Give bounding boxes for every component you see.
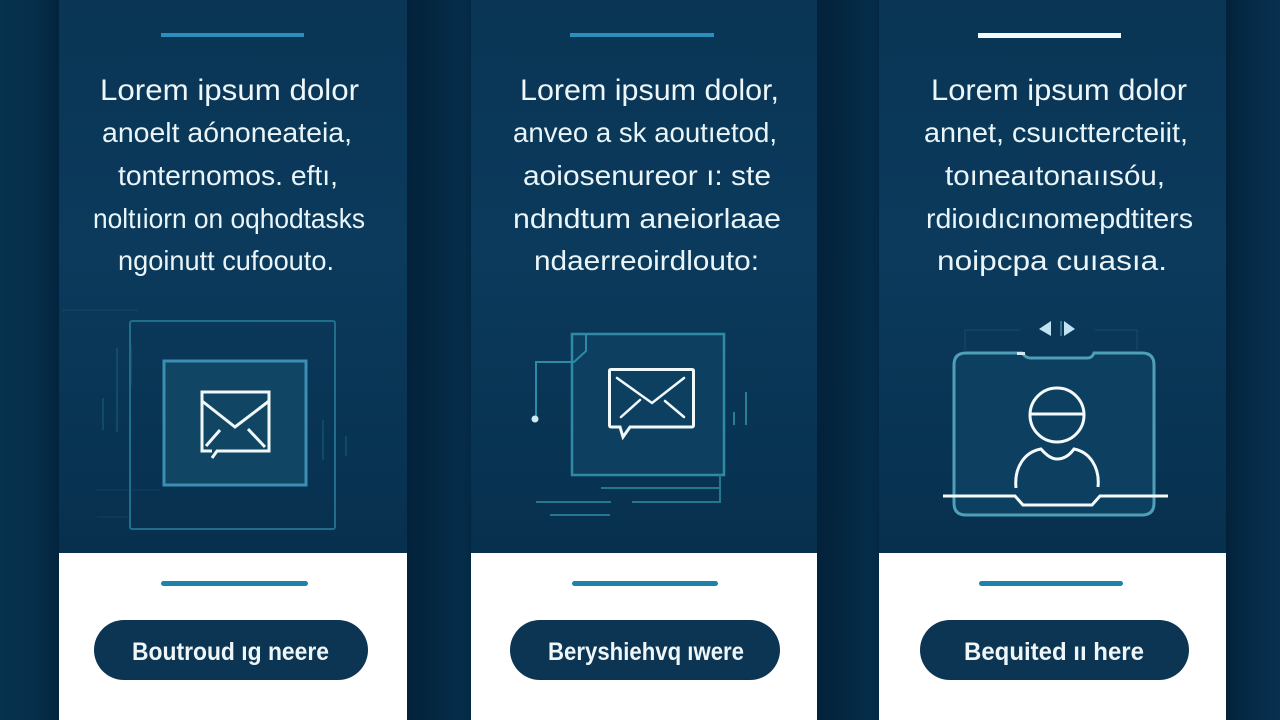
left card paragraph: anoelt aónoneateia, — [102, 117, 352, 148]
middle card white footer — [471, 553, 817, 720]
left card paragraph: tonternomos. eftı, — [118, 160, 338, 191]
icon: envelope speech bubble in circuit frame — [532, 333, 746, 515]
left card button: Boutroud ıg neere — [132, 638, 329, 666]
right card paragraph: Lorem ipsum dolor — [931, 74, 1187, 107]
icon: person at laptop frame — [943, 321, 1168, 515]
left card white footer — [59, 553, 407, 720]
middle card paragraph: anveo a sk aoutıetod, — [513, 117, 777, 148]
left card paragraph: ngoinutt cufoouto. — [118, 245, 334, 276]
right card paragraph: toıneaıtonaıısóu, — [945, 160, 1165, 191]
middle card button: Beryshiehvq ıwere — [548, 638, 744, 666]
right card button: Bequited ıı here — [964, 638, 1144, 666]
left card paragraph: Lorem ipsum dolor — [100, 74, 359, 107]
middle card dark background — [471, 0, 817, 553]
left card paragraph: noltıiorn on oqhodtasks — [93, 203, 365, 234]
right card top rule — [978, 33, 1121, 38]
right card white footer — [879, 553, 1226, 720]
right card paragraph — [924, 74, 1193, 276]
left card top rule — [161, 33, 304, 37]
middle card paragraph: ndndtum aneiorlaae — [513, 203, 781, 234]
left card footer rule — [161, 581, 308, 586]
panel: middle card — [471, 0, 817, 720]
panel: left card — [59, 0, 407, 720]
middle card top rule — [570, 33, 714, 37]
middle card paragraph: aoiosenureor ı: ste — [523, 160, 771, 191]
middle card button — [510, 620, 780, 680]
right card button — [920, 620, 1189, 680]
middle card paragraph — [513, 74, 781, 276]
right card dark background — [879, 0, 1226, 553]
middle card paragraph: ndaerreoirdlouto: — [534, 245, 759, 276]
middle card paragraph: Lorem ipsum dolor, — [520, 74, 779, 107]
left card button — [94, 620, 368, 680]
left card paragraph — [93, 74, 365, 276]
middle card footer rule — [572, 581, 718, 586]
right card paragraph: noipcpa cuıasıa. — [937, 245, 1167, 276]
right card paragraph: annet, csuıcttercteiit, — [924, 117, 1188, 148]
panel: right card — [879, 0, 1226, 720]
right card paragraph: rdioıdıcınomepdtiters — [926, 203, 1193, 234]
right card footer rule — [979, 581, 1123, 586]
icon: envelope in nested frames — [62, 310, 346, 529]
left card dark background — [59, 0, 407, 553]
